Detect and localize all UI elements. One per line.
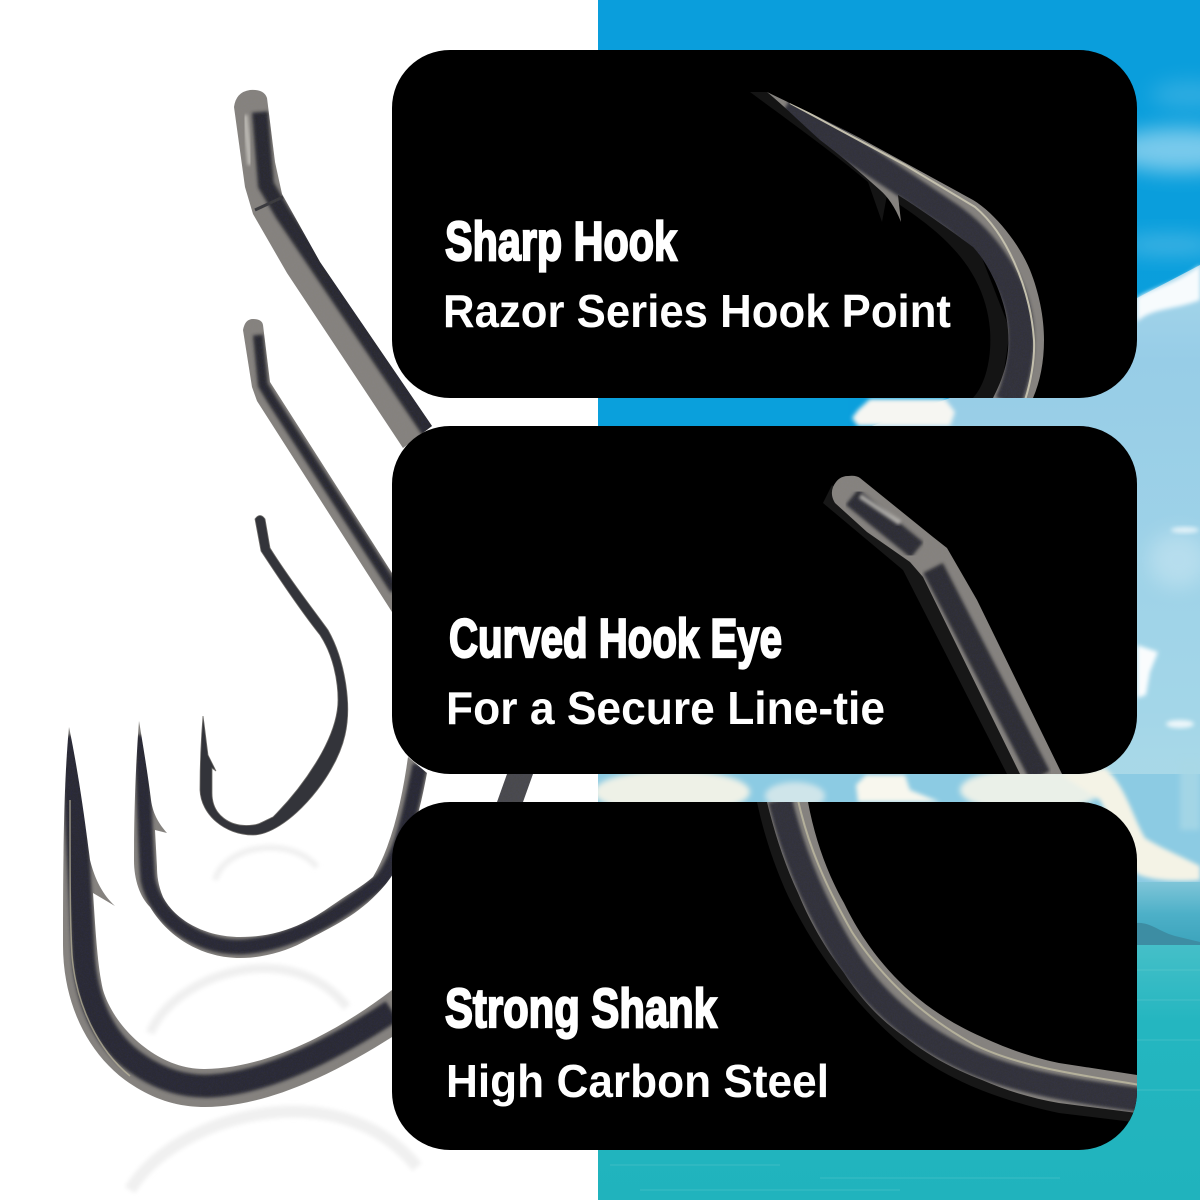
medium hook: [130, 315, 430, 963]
heading: Strong Shank: [445, 977, 717, 1039]
heading: Curved Hook Eye: [449, 607, 782, 669]
gap clouds between first and second panels: [852, 399, 955, 426]
panel: sharp hook: [392, 50, 1137, 405]
background: white left half: [0, 0, 598, 1200]
hook reflections: [130, 848, 417, 1190]
small hook: [200, 516, 348, 835]
gap clouds between second and third panels: [598, 774, 1200, 884]
subheading: Razor Series Hook Point: [443, 285, 951, 337]
background: sky and sea photo: [594, 0, 1200, 1200]
heading: Sharp Hook: [445, 210, 677, 272]
panel: curved hook eye: [392, 426, 1137, 780]
panel: strong shank: [392, 800, 1140, 1150]
subheading: High Carbon Steel: [446, 1055, 829, 1107]
large hook: [55, 85, 533, 1115]
distant island: [1137, 923, 1200, 946]
hook eye close-up: [823, 470, 1070, 780]
hook point close-up: [750, 85, 1050, 405]
shank close-up: [757, 800, 1140, 1122]
subheading: For a Secure Line-tie: [446, 682, 885, 734]
